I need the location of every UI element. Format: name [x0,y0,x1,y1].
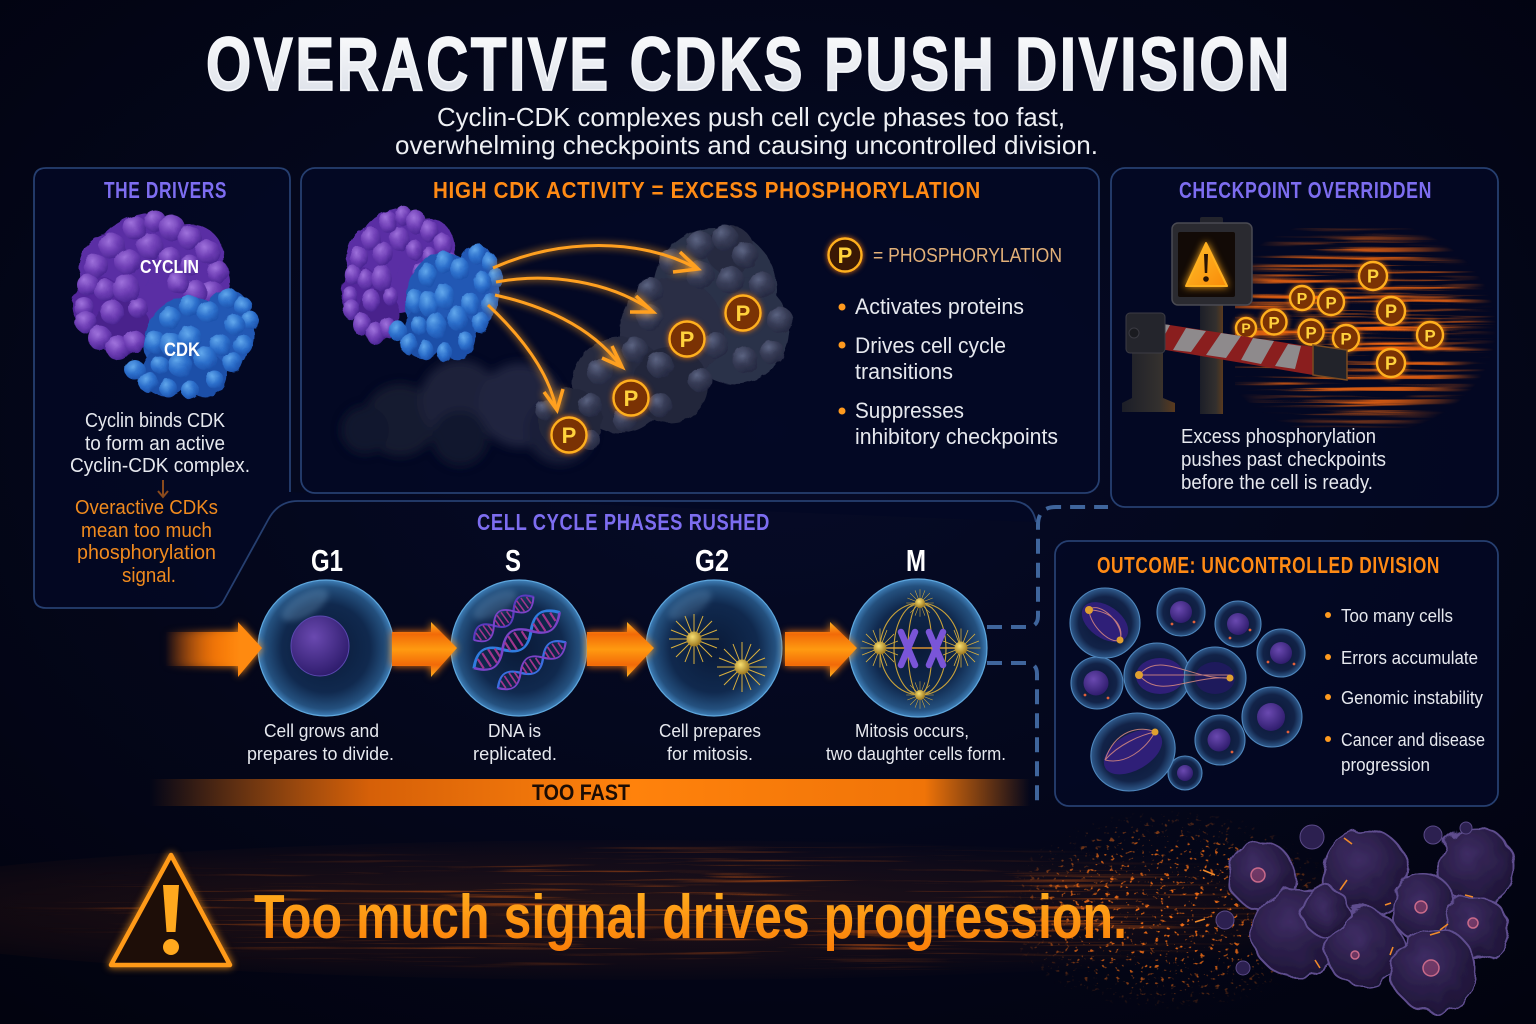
text: overactive CDKs: Overactive CDKs [75,496,218,519]
arrow: G1 to S [392,622,457,677]
cell: S with DNA [451,580,587,716]
P badges behind barrier: P [1297,291,1308,308]
arrows: phosphate transfer [488,246,698,410]
phase labels: G2 [695,543,729,578]
list: effects of phosphorylation [838,294,1058,449]
list: outcomes: Genomic instability [1341,687,1484,708]
P badges behind barrier: P [1241,320,1251,336]
bottom energy band [0,810,1460,1010]
legend: P = phosphorylation: P [838,243,852,268]
arrow: down to overactive [158,480,168,497]
list: outcomes: progression [1341,754,1430,775]
heading: cell cycle phases rushed: CELL CYCLE PHASES RUSHED [477,509,770,535]
subtitle: overwhelming checkpoints and causing uncontrolled division. [395,130,1098,160]
P badges behind barrier: P [1385,302,1397,322]
panel: the drivers [34,168,1036,608]
captions: replicated. [473,743,557,764]
P badges behind barrier: P [1305,324,1317,342]
text: excess phosphorylation: before the cell is ready. [1181,471,1373,494]
P badges behind barrier: P [1367,266,1379,286]
icon: warning sign on post [1172,217,1252,414]
captions [247,720,1006,764]
text: cyclin binds CDK [70,409,250,477]
illustration: tumor cell cluster [1195,822,1514,1012]
subtitle: Cyclin-CDK complexes push cell cycle phases too fast, [437,102,1065,132]
P badges behind barrier [1236,262,1443,377]
arrow: G2 to M [785,622,857,677]
P badges on substrate: P [736,301,750,326]
heading: the drivers: THE DRIVERS [104,177,227,203]
P badges on substrate: P [562,423,576,448]
captions: for mitosis. [667,743,753,764]
icon: cyclin-CDK complex [72,210,259,399]
tagline: Too much signal drives progression. [254,883,1127,952]
cell: G2 with centrosomes [646,580,782,716]
panel: checkpoint overridden [1111,168,1498,507]
text: cyclin binds CDK: Cyclin binds CDK [85,409,225,432]
captions: DNA is [488,720,541,741]
panel: high CDK activity [301,168,1099,493]
cell: G1 [258,580,394,716]
text: overactive CDKs [75,496,218,587]
icon: cyclin-CDK complex active [341,205,503,362]
connector: dashed lines to outcome [987,507,1108,806]
speed streaks [1235,228,1497,428]
panel: outcome [1055,541,1498,806]
text: overactive CDKs: phosphorylation [77,541,216,564]
icon: warning triangle [111,855,230,965]
phase labels: M [906,543,926,578]
text: overactive CDKs: signal. [122,564,176,587]
P badges behind barrier: P [1424,326,1436,346]
list: effects of phosphorylation: Drives cell cycle [855,333,1006,358]
heading: checkpoint overridden: CHECKPOINT OVERRIDDEN [1179,177,1432,203]
list: effects of phosphorylation: transitions [855,359,953,384]
list: outcomes: Cancer and disease [1341,729,1485,750]
list: outcomes: Too many cells [1341,605,1453,626]
arrow: S to G2 [587,622,654,677]
list: outcomes [1325,605,1485,775]
captions: prepares to divide. [247,743,394,764]
legend: P = phosphorylation [828,238,1062,272]
captions: Cell prepares [659,720,761,741]
bar: too fast: TOO FAST [532,780,630,805]
text: excess phosphorylation: pushes past checkpoints [1181,448,1386,471]
list: outcomes: Errors accumulate [1341,647,1478,668]
text: excess phosphorylation: Excess phosphorylation [1181,425,1376,448]
phase labels: S [505,543,521,578]
P badges behind barrier: P [1385,354,1397,374]
list: effects of phosphorylation: Suppresses [855,398,964,423]
P badges on substrate: P [624,386,638,411]
icon: barrier gate [1122,313,1347,412]
P badges behind barrier: P [1268,314,1280,332]
phase labels [311,543,926,578]
P badges on substrate: P [680,327,694,352]
section: cell cycle phases [150,509,1030,806]
subtitle [395,102,1098,160]
P badges behind barrier: P [1340,330,1352,348]
text: overactive CDKs: mean too much [81,519,212,542]
phase labels: G1 [311,543,343,578]
captions: Cell grows and [264,720,379,741]
icon: cyclin-CDK complex: CDK [164,340,200,361]
P badges behind barrier: P [1325,294,1337,312]
bar: too fast [150,779,1030,806]
list: effects of phosphorylation: Activates proteins [855,294,1024,319]
illustration: dividing cells [1070,588,1305,805]
text: excess phosphorylation [1181,425,1386,494]
P badges on substrate [552,296,760,452]
heading: high CDK activity: HIGH CDK ACTIVITY = EXCESS PHOSPHORYLATION [433,177,981,203]
captions: two daughter cells form. [826,743,1006,764]
illustration: substrate protein [341,225,793,466]
captions: Mitosis occurs, [855,720,969,741]
legend: P = phosphorylation: = PHOSPHORYLATION [873,245,1062,267]
cell: M with spindle [849,579,987,717]
text: cyclin binds CDK: to form an active [85,432,225,455]
list: effects of phosphorylation: inhibitory checkpoints [855,424,1058,449]
arrow: into G1 [165,622,262,677]
text: cyclin binds CDK: Cyclin-CDK complex. [70,454,250,477]
icon: cyclin-CDK complex: CYCLIN [140,256,199,277]
